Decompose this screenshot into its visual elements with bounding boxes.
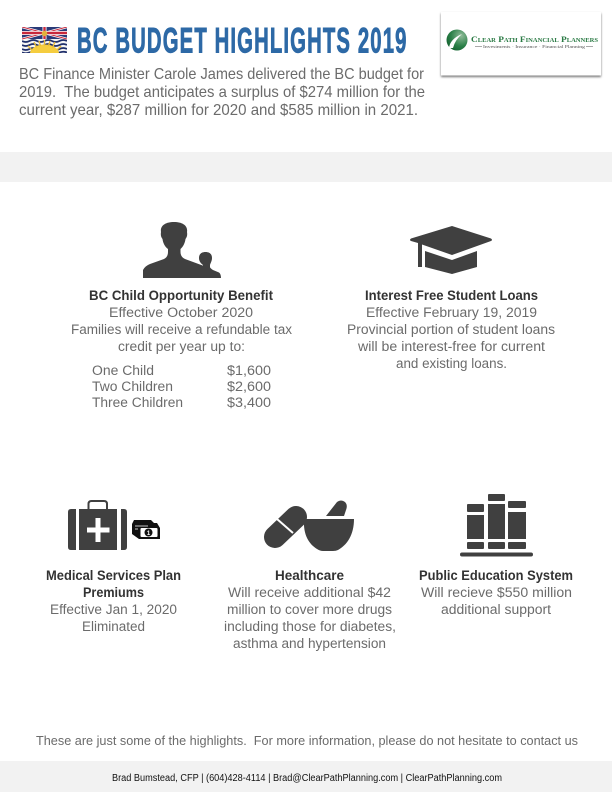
title: BC BUDGET HIGHLIGHTS 2019 [77,22,406,61]
description: Will recieve $550 million [421,585,572,600]
credit amounts table [92,363,271,410]
panel: BC Child Opportunity Benefit [71,222,292,410]
description: Provincial portion of student loans [347,322,555,337]
footer contact line: Brad Bumstead, CFP | (604)428-4114 | Brad@ClearPathPlanning.com | ClearPathPlanning.com [112,773,502,784]
description: asthma and hypertension [233,636,386,651]
icon: adult and child [143,222,221,278]
credit amounts table: $1,600 [227,363,271,378]
description [421,585,572,617]
icon: books [460,494,533,556]
description: additional support [441,602,551,617]
description [347,305,555,371]
description: Families will receive a refundable tax [71,322,292,337]
heading [46,568,181,600]
description [224,585,396,651]
top grey band [0,152,612,182]
description: including those for diabetes, [224,619,396,634]
panel: Healthcare [224,500,396,651]
description [71,305,292,354]
intro text: current year, $287 million for 2020 and $585 million in 2021. [19,102,418,119]
footer band [0,761,612,792]
logo card [441,12,601,76]
icon: graduation cap [410,226,492,274]
description [50,602,177,634]
panel: Public Education System [419,494,573,617]
heading: BC Child Opportunity Benefit [89,288,273,303]
credit amounts table: $2,600 [227,379,271,394]
description: and existing loans. [396,356,507,371]
intro text [19,66,425,119]
logo wordmark: Clear Path Financial Planners [471,34,599,44]
credit amounts table: One Child [92,363,154,378]
heading: Interest Free Student Loans [365,288,538,303]
intro text: BC Finance Minister Carole James delivered the BC budget for [19,66,425,83]
description: Will receive additional $42 [228,585,391,600]
credit amounts table: $3,400 [227,395,271,410]
description: credit per year up to: [118,339,245,354]
description: Effective February 19, 2019 [366,305,537,320]
icon: money: 1 [147,531,151,537]
panel: Interest Free Student Loans [347,226,555,371]
heading: Medical Services Plan [46,568,181,583]
closing note: These are just some of the highlights. For more information, please do not hesitate to contact us [36,733,578,748]
description: million to cover more drugs [227,602,392,617]
description: Effective October 2020 [109,305,253,320]
icon: pill and mortar [275,500,354,551]
description: Effective Jan 1, 2020 [50,602,177,617]
credit amounts table: Two Children [92,379,173,394]
heading: Public Education System [419,568,573,583]
icon: medical bag [68,501,127,550]
icon: logo globe [446,30,468,50]
description: Eliminated [82,619,145,634]
intro text: 2019. The budget anticipates a surplus of $274 million for the [19,84,425,101]
logo tagline: Investments · Insurance · Financial Planning [483,45,585,49]
credit amounts table: Three Children [92,395,183,410]
heading: Premiums [83,585,144,600]
panel: Medical Services Plan Premiums [46,501,181,634]
description: will be interest-free for current [357,339,545,354]
icon: BC flag [22,27,67,54]
heading: Healthcare [275,568,344,583]
